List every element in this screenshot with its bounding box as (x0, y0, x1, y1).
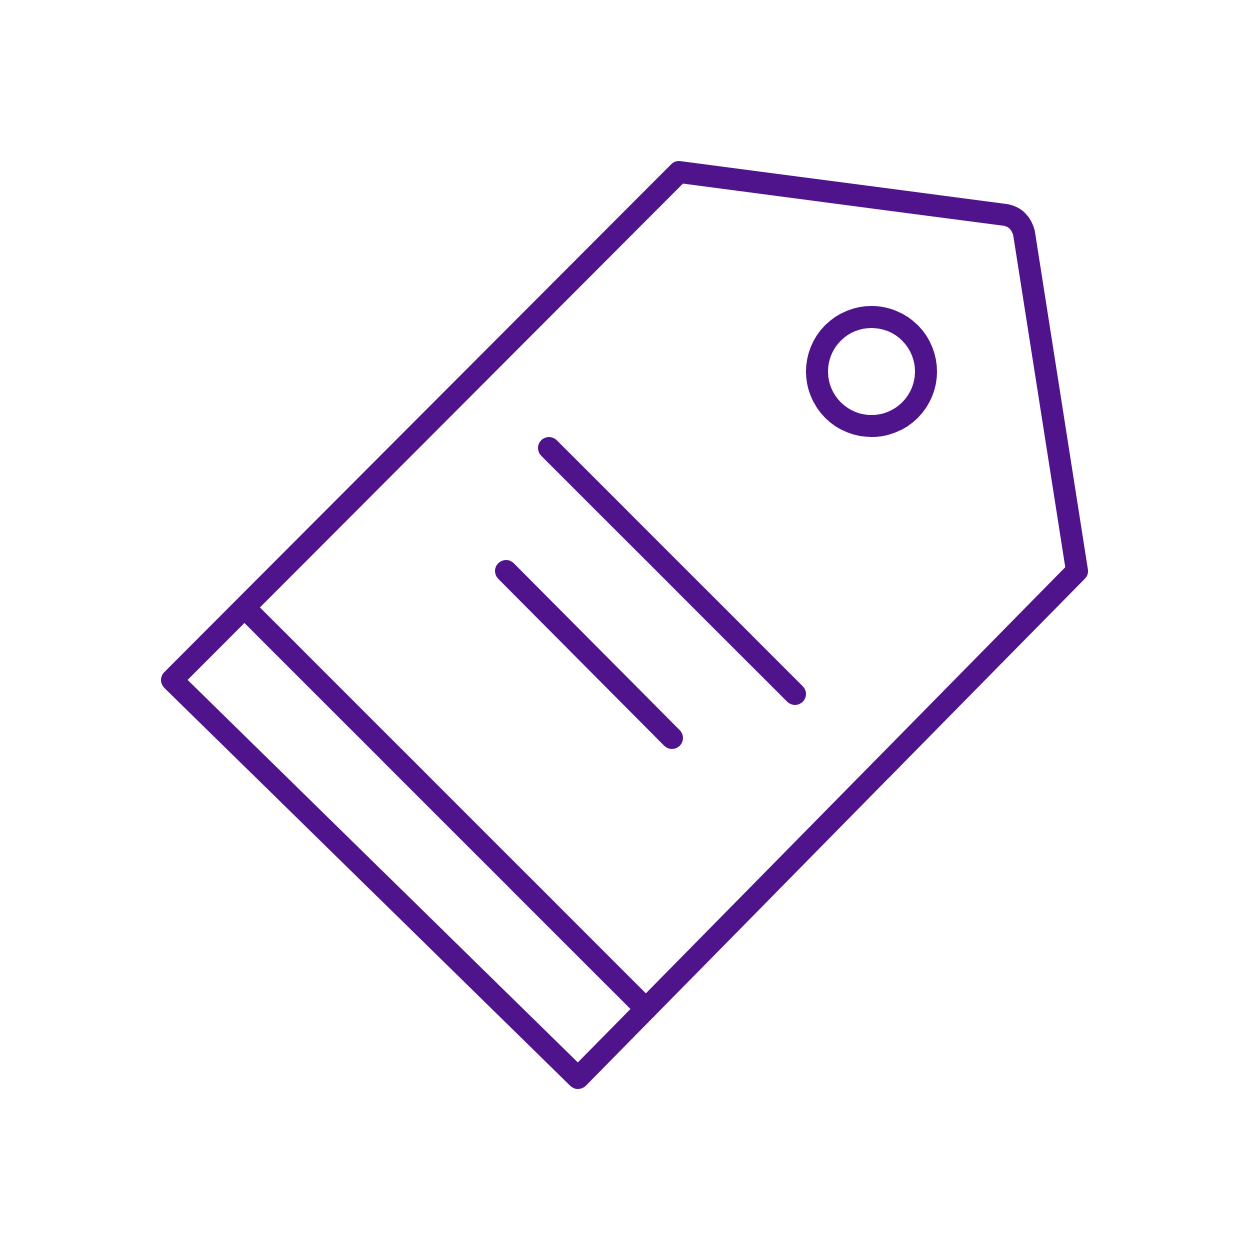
tag eyelet hole (817, 317, 926, 426)
short text line (506, 571, 672, 738)
long text line (549, 448, 795, 694)
tag band line (246, 609, 646, 1009)
tag outline (172, 172, 1077, 1078)
